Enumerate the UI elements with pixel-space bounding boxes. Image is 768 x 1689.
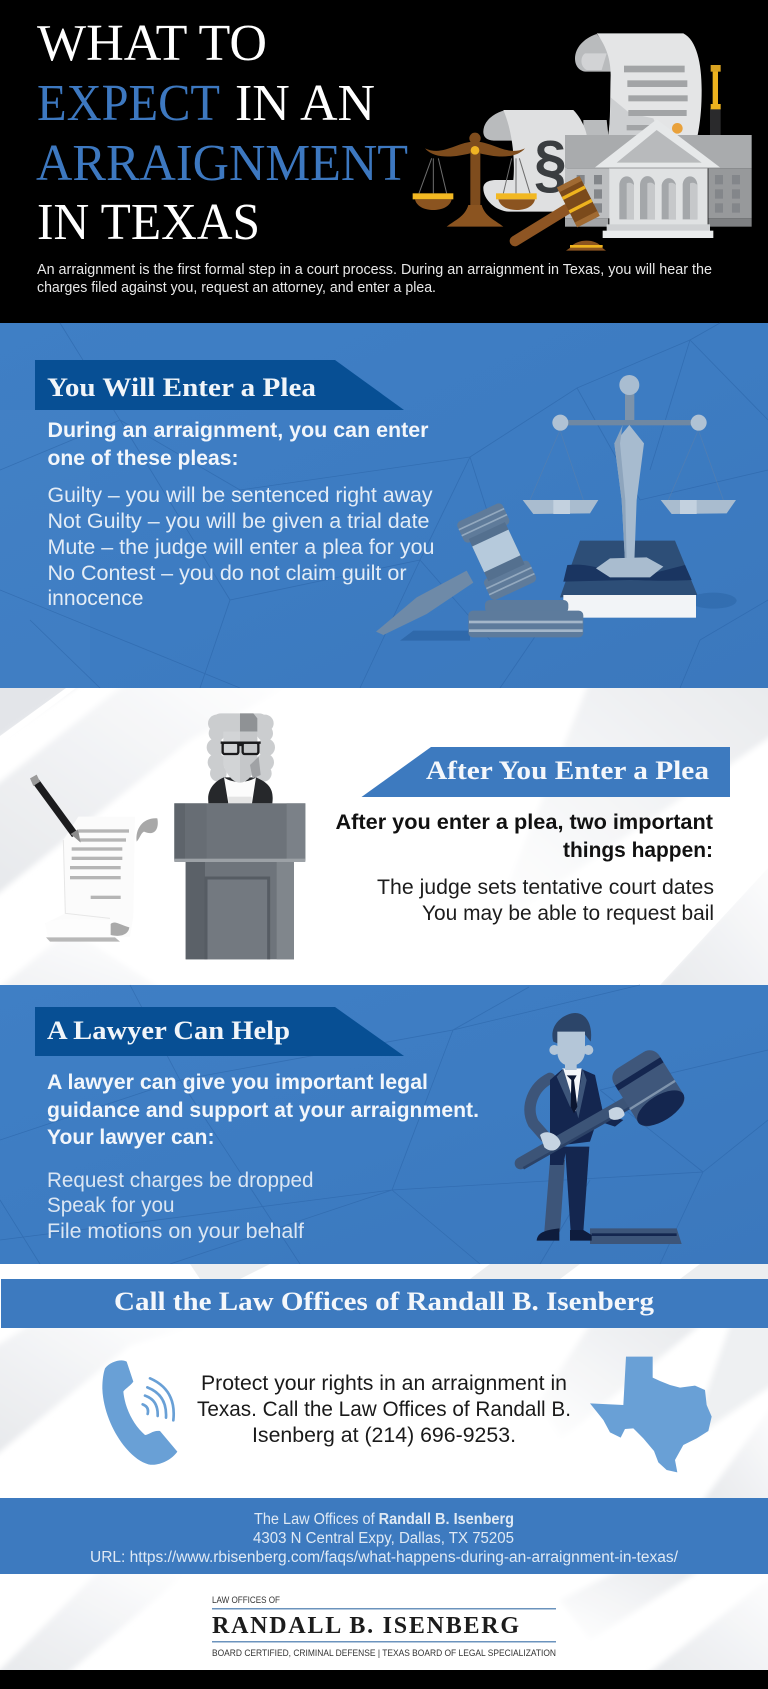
subheading: Your lawyer can: bbox=[47, 1125, 214, 1149]
list of lawyer actions bbox=[47, 1168, 314, 1243]
logo: LAW OFFICES OF bbox=[212, 1595, 280, 1606]
subheading: things happen: bbox=[563, 838, 713, 862]
illustration: lawyer with gavel bbox=[521, 1013, 690, 1244]
call text: Texas. Call the Law Offices of Randall B. bbox=[197, 1397, 571, 1421]
title: WHAT TO bbox=[37, 15, 267, 72]
subheading: guidance and support at your arraignment. bbox=[47, 1098, 479, 1122]
header bar: call: Call the Law Offices of Randall B. Isenberg bbox=[114, 1287, 654, 1316]
icon: lawyer bbox=[530, 1013, 682, 1244]
subheading: During an arraignment, you can enter bbox=[48, 418, 429, 442]
address text: URL: https://www.rbisenberg.com/faqs/what-happens-during-an-arraignment-in-texas/ bbox=[90, 1549, 679, 1566]
subheading: one of these pleas: bbox=[48, 446, 238, 470]
icon: large gavel bbox=[521, 1046, 690, 1168]
banner: a lawyer can help bbox=[35, 1007, 404, 1056]
list of next steps: The judge sets tentative court dates bbox=[377, 875, 714, 899]
title: EXPECT bbox=[37, 75, 220, 132]
subheading: A lawyer can give you important legal bbox=[47, 1070, 428, 1094]
list of pleas: No Contest – you do not claim guilt or bbox=[48, 561, 406, 585]
call text: Isenberg at (214) 696-9253. bbox=[252, 1423, 516, 1447]
title: IN TEXAS bbox=[37, 194, 260, 251]
icon: book bbox=[560, 541, 697, 618]
panel: logo bbox=[0, 1570, 768, 1680]
icon: pen bbox=[710, 65, 721, 135]
address text: The Law Offices of Randall B. Isenberg bbox=[254, 1511, 514, 1528]
banner: after you enter a plea: After You Enter a Plea bbox=[426, 756, 709, 785]
intro text: An arraignment is the first formal step in a court process. During an arraignment in Texas, you will hear the bbox=[37, 262, 712, 278]
icon: phone bbox=[102, 1360, 177, 1465]
icon: silver scales bbox=[523, 375, 736, 577]
subheading bbox=[47, 1070, 479, 1149]
logo: BOARD CERTIFIED, CRIMINAL DEFENSE | TEXAS BOARD OF LEGAL SPECIALIZATION bbox=[212, 1648, 556, 1659]
call text bbox=[197, 1371, 571, 1447]
panel: call to action bbox=[0, 1264, 768, 1505]
list of lawyer actions: Request charges be dropped bbox=[47, 1168, 314, 1192]
list of pleas: Guilty – you will be sentenced right away bbox=[48, 483, 433, 507]
illustration: judge, podium and scroll bbox=[30, 713, 305, 959]
icon: texas map bbox=[590, 1357, 712, 1472]
intro text bbox=[37, 262, 712, 296]
list of pleas bbox=[48, 483, 434, 610]
icon: podium bbox=[174, 803, 305, 959]
address text bbox=[90, 1511, 679, 1566]
call text: Protect your rights in an arraignment in bbox=[201, 1371, 567, 1395]
list of pleas: innocence bbox=[48, 586, 144, 610]
title bbox=[36, 15, 408, 251]
illustration: scales, book and gavel bbox=[376, 375, 737, 641]
title: IN AN bbox=[235, 75, 375, 132]
banner: a lawyer can help: A Lawyer Can Help bbox=[47, 1016, 290, 1045]
icon: judge bbox=[207, 713, 275, 804]
icon: silver gavel bbox=[376, 502, 583, 637]
icon: large scroll bbox=[575, 33, 702, 135]
list of lawyer actions: Speak for you bbox=[47, 1193, 174, 1217]
list of lawyer actions: File motions on your behalf bbox=[47, 1219, 304, 1243]
icon: second scroll bbox=[483, 110, 608, 212]
panel: address bar bbox=[0, 1498, 768, 1574]
list of next steps bbox=[377, 875, 714, 925]
banner: you will enter a plea bbox=[35, 360, 404, 410]
list of next steps: You may be able to request bail bbox=[422, 901, 714, 925]
illustration: courthouse, scrolls, scales and gavel bbox=[413, 33, 752, 251]
logo bbox=[212, 1595, 556, 1659]
subheading bbox=[336, 810, 713, 862]
panel: after you enter a plea bbox=[0, 680, 768, 995]
title: ARRAIGNMENT bbox=[36, 135, 408, 192]
subheading: After you enter a plea, two important bbox=[336, 810, 713, 834]
icon: brown gavel bbox=[515, 176, 606, 251]
panel: header bbox=[0, 0, 768, 323]
address text: 4303 N Central Expy, Dallas, TX 75205 bbox=[253, 1530, 514, 1547]
panel: a lawyer can help bbox=[0, 985, 768, 1264]
header bar: call bbox=[1, 1279, 768, 1328]
banner: after you enter a plea bbox=[362, 747, 730, 797]
footer bar bbox=[0, 1670, 768, 1689]
icon: brown scales bbox=[413, 133, 537, 227]
panel: you will enter a plea bbox=[0, 323, 768, 688]
icon: paper scroll bbox=[45, 817, 158, 942]
list of pleas: Mute – the judge will enter a plea for you bbox=[48, 535, 434, 559]
icon: pen bbox=[30, 775, 81, 843]
icon: courthouse bbox=[565, 119, 752, 238]
list of pleas: Not Guilty – you will be given a trial date bbox=[48, 509, 430, 533]
icon: shadows bbox=[400, 593, 737, 641]
banner: you will enter a plea: You Will Enter a Plea bbox=[47, 373, 316, 402]
icon: second scroll: § bbox=[534, 127, 567, 200]
subheading bbox=[48, 418, 429, 470]
intro text: charges filed against you, request an attorney, and enter a plea. bbox=[37, 280, 436, 296]
logo: RANDALL B. ISENBERG bbox=[212, 1613, 519, 1639]
